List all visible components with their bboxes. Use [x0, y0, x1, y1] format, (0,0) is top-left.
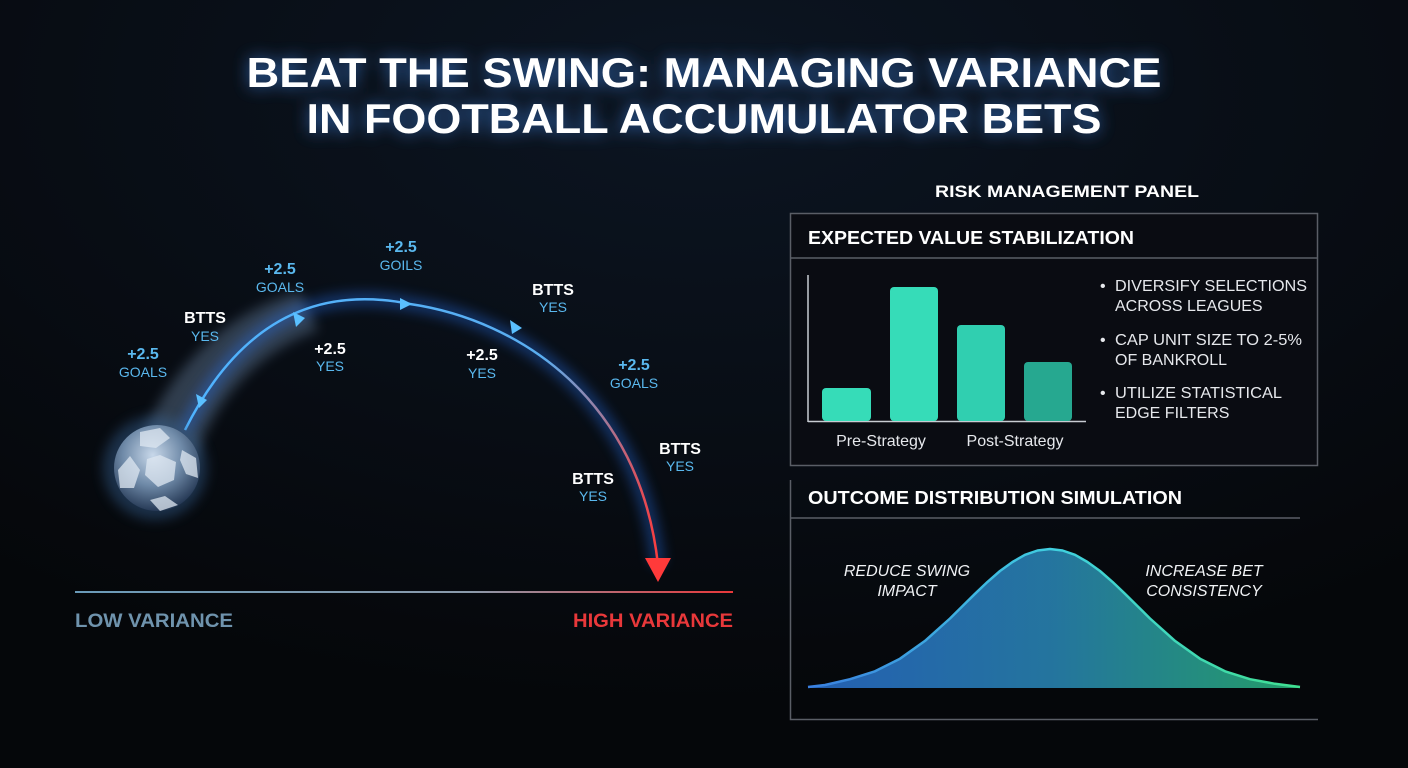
- variance arc chart: HIGH VARIANCE: [573, 611, 733, 632]
- bar chart: Post-Strategy: [967, 433, 1063, 450]
- bullet list: EDGE FILTERS: [1115, 405, 1229, 422]
- arc line: [185, 299, 658, 565]
- annotation: reduce swing: IMPACT: [877, 583, 938, 600]
- variance axis: [75, 591, 733, 593]
- bar chart: [808, 275, 1086, 450]
- title: IN FOOTBALL ACCUMULATOR BETS: [306, 95, 1102, 142]
- ball trail: [130, 292, 318, 490]
- axis labels: LOW VARIANCE: [75, 611, 233, 632]
- market labels: YES: [539, 299, 567, 315]
- panel heading: EXPECTED VALUE STABILIZATION: [808, 228, 1134, 248]
- bullet list: ACROSS LEAGUES: [1115, 298, 1263, 315]
- market labels: YES: [316, 358, 344, 374]
- arrow markers: [196, 298, 522, 408]
- title: [246, 49, 1162, 142]
- panel heading: OUTCOME DISTRIBUTION SIMULATION: [808, 488, 1182, 508]
- market labels: BTTS: [184, 310, 226, 327]
- bullet list: UTILIZE STATISTICAL: [1115, 385, 1282, 402]
- market labels: +2.5: [466, 347, 498, 364]
- bar chart: Pre-Strategy: [836, 433, 926, 450]
- annotation: reduce swing: REDUCE SWING: [844, 563, 970, 580]
- bullet list: CAP UNIT SIZE TO 2-5%: [1115, 332, 1302, 349]
- market labels: YES: [468, 365, 496, 381]
- annotation: increase consistency: CONSISTENCY: [1146, 583, 1263, 600]
- bullet list: •: [1100, 278, 1106, 295]
- market labels: BTTS: [572, 471, 614, 488]
- bullet list: DIVERSIFY SELECTIONS: [1115, 278, 1307, 295]
- market labels: +2.5: [618, 357, 650, 374]
- market labels: YES: [579, 488, 607, 504]
- market labels: GOILS: [380, 257, 422, 273]
- title: BEAT THE SWING: MANAGING VARIANCE: [246, 49, 1162, 96]
- market labels: YES: [666, 458, 694, 474]
- market labels: +2.5: [264, 261, 296, 278]
- icon: football: [103, 416, 207, 520]
- panel: outcome distribution simulation: [790, 480, 1318, 720]
- risk panel heading: RISK MANAGEMENT PANEL: [935, 182, 1199, 201]
- annotation: increase consistency: INCREASE BET: [1145, 563, 1264, 580]
- market labels: +2.5: [127, 346, 159, 363]
- panel: expected value stabilization: [790, 214, 1318, 466]
- market labels: GOALS: [256, 279, 304, 295]
- variance arc chart: [75, 239, 733, 632]
- market labels: BTTS: [659, 441, 701, 458]
- market labels: +2.5: [314, 341, 346, 358]
- market labels: GOALS: [610, 375, 658, 391]
- bullet list: •: [1100, 385, 1106, 402]
- market labels: BTTS: [532, 282, 574, 299]
- arc glow: [185, 299, 658, 565]
- bullet list: OF BANKROLL: [1115, 352, 1227, 369]
- bullet list: •: [1100, 332, 1106, 349]
- title: BEAT THE SWING: MANAGING VARIANCE: [246, 49, 1162, 96]
- bell curve chart: [808, 549, 1300, 688]
- market labels: YES: [191, 328, 219, 344]
- bullet list: [1100, 278, 1307, 422]
- market labels: GOALS: [119, 364, 167, 380]
- market labels: +2.5: [385, 239, 417, 256]
- market labels: [119, 239, 701, 504]
- title: IN FOOTBALL ACCUMULATOR BETS: [306, 95, 1102, 142]
- red arrowhead: [645, 558, 671, 582]
